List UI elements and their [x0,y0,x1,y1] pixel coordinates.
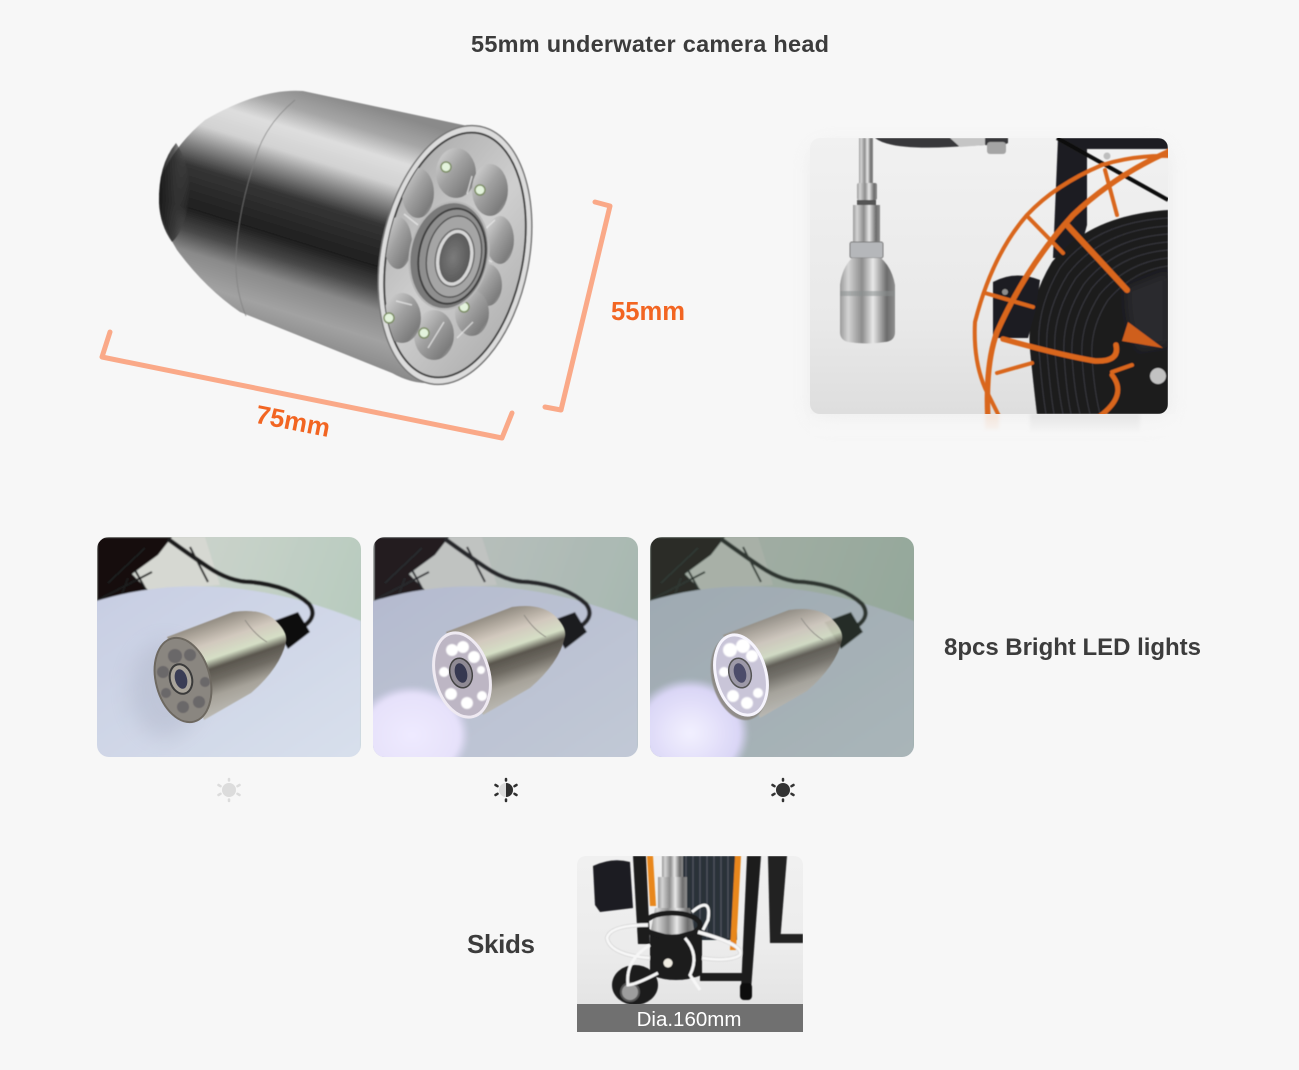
lens [725,656,755,690]
crank handle [776,934,803,943]
diagonal strut [1057,138,1168,200]
white plastic skids [607,905,740,990]
icon: low brightness sun [218,779,240,801]
hub motor [1127,272,1168,350]
camera front face [357,112,553,398]
seam line [236,100,295,316]
orange reel bar left [647,856,656,906]
icon: high brightness sun [772,779,794,801]
photo: skids on camera [577,856,803,1005]
post bolt [1104,152,1110,160]
green dimming tint [650,537,914,757]
skid knob [664,958,672,968]
rear cable end [159,143,190,242]
panel: soft shadow behind reel photo [812,146,1168,422]
reflection fade [810,414,1180,436]
photo: LED medium [373,537,638,757]
camera body [446,606,566,715]
silver connector middle [658,877,687,908]
photo background [810,299,1036,414]
scene background [643,530,933,765]
table shadow [132,646,188,736]
LED lights label: 8pcs Bright LED lights [944,634,1201,661]
arm bolt [987,142,1006,154]
LED reflector cups [383,148,514,360]
lit face [706,629,776,721]
black skid cup [650,930,702,980]
title: 55mm underwater camera head [471,31,829,57]
cable coil [1029,210,1168,414]
LED emitters [384,162,485,338]
camera body [156,610,287,722]
photo: LED high [630,530,933,788]
caption text: Dia.160mm [637,1008,741,1031]
camera head illustration [159,91,553,398]
photo: LED off [97,537,361,757]
camera head [840,258,895,344]
lens assembly [400,195,498,316]
panel: camera and reel photo reflection [985,414,1140,432]
lens centre [174,669,188,689]
light pool [373,687,468,757]
connector dark band [857,200,876,205]
LED glow spots [439,641,487,709]
camera head seam [840,291,895,296]
crank arm [768,856,787,943]
black post [1053,138,1168,258]
lower frame bar [700,973,746,981]
cable windings [1039,218,1168,414]
wheel hub [621,983,639,1001]
connector sleeve [853,205,880,243]
icon: medium brightness sun [496,779,516,801]
light pool [630,678,750,788]
lit face [432,631,492,719]
lens centre [453,662,469,684]
lower bracket [1110,350,1168,414]
skid ring [644,913,700,937]
scene background [97,537,361,757]
dimension bracket: 55mm [545,202,610,410]
scene background [373,537,638,757]
dimension label: 55mm: 55mm [611,298,685,326]
dimension bracket: 75mm [102,332,512,438]
panel: camera and reel photo [810,138,1172,420]
cable windings [686,856,728,938]
foot [740,983,752,1000]
pole holder cup [593,860,633,912]
outer rim [357,112,553,398]
dimming tint [373,537,638,757]
orange triangle brace [1122,322,1163,348]
camera body [702,609,842,727]
silver connector top [662,856,683,878]
photo background [577,856,803,1004]
lens [168,663,194,695]
cable coil [680,856,737,940]
bright lens ring [431,226,479,290]
skid edge shading [607,925,740,959]
hanging arm [875,138,1008,148]
holder bolt [1002,289,1008,295]
connector nut [857,183,877,200]
LED glow spots [719,639,763,709]
LED cups [157,649,210,713]
black frame left [633,856,650,944]
caption bar [577,1004,803,1032]
barrel ring [410,203,494,310]
orange reel bar right [730,856,741,950]
orange reel frame [975,150,1172,420]
lens glass [435,230,474,285]
lens [446,656,476,690]
camera head in cup [651,908,694,936]
silver collar [420,211,488,302]
silver bolt [1150,368,1166,384]
camera rim [154,636,212,724]
pole holder [993,275,1040,338]
black leg [741,856,761,990]
camera silhouette [160,91,477,383]
threaded barrel [400,195,498,316]
flexible neck [859,138,873,184]
knurled collar [850,242,883,258]
wheel [612,965,658,1005]
reflector streaks [396,176,495,348]
inner rim [365,120,545,390]
skids label: Skids [467,929,535,959]
dimension label: 75mm: 75mm [253,399,333,443]
arm bracket [950,138,985,147]
lens centre [732,662,748,684]
